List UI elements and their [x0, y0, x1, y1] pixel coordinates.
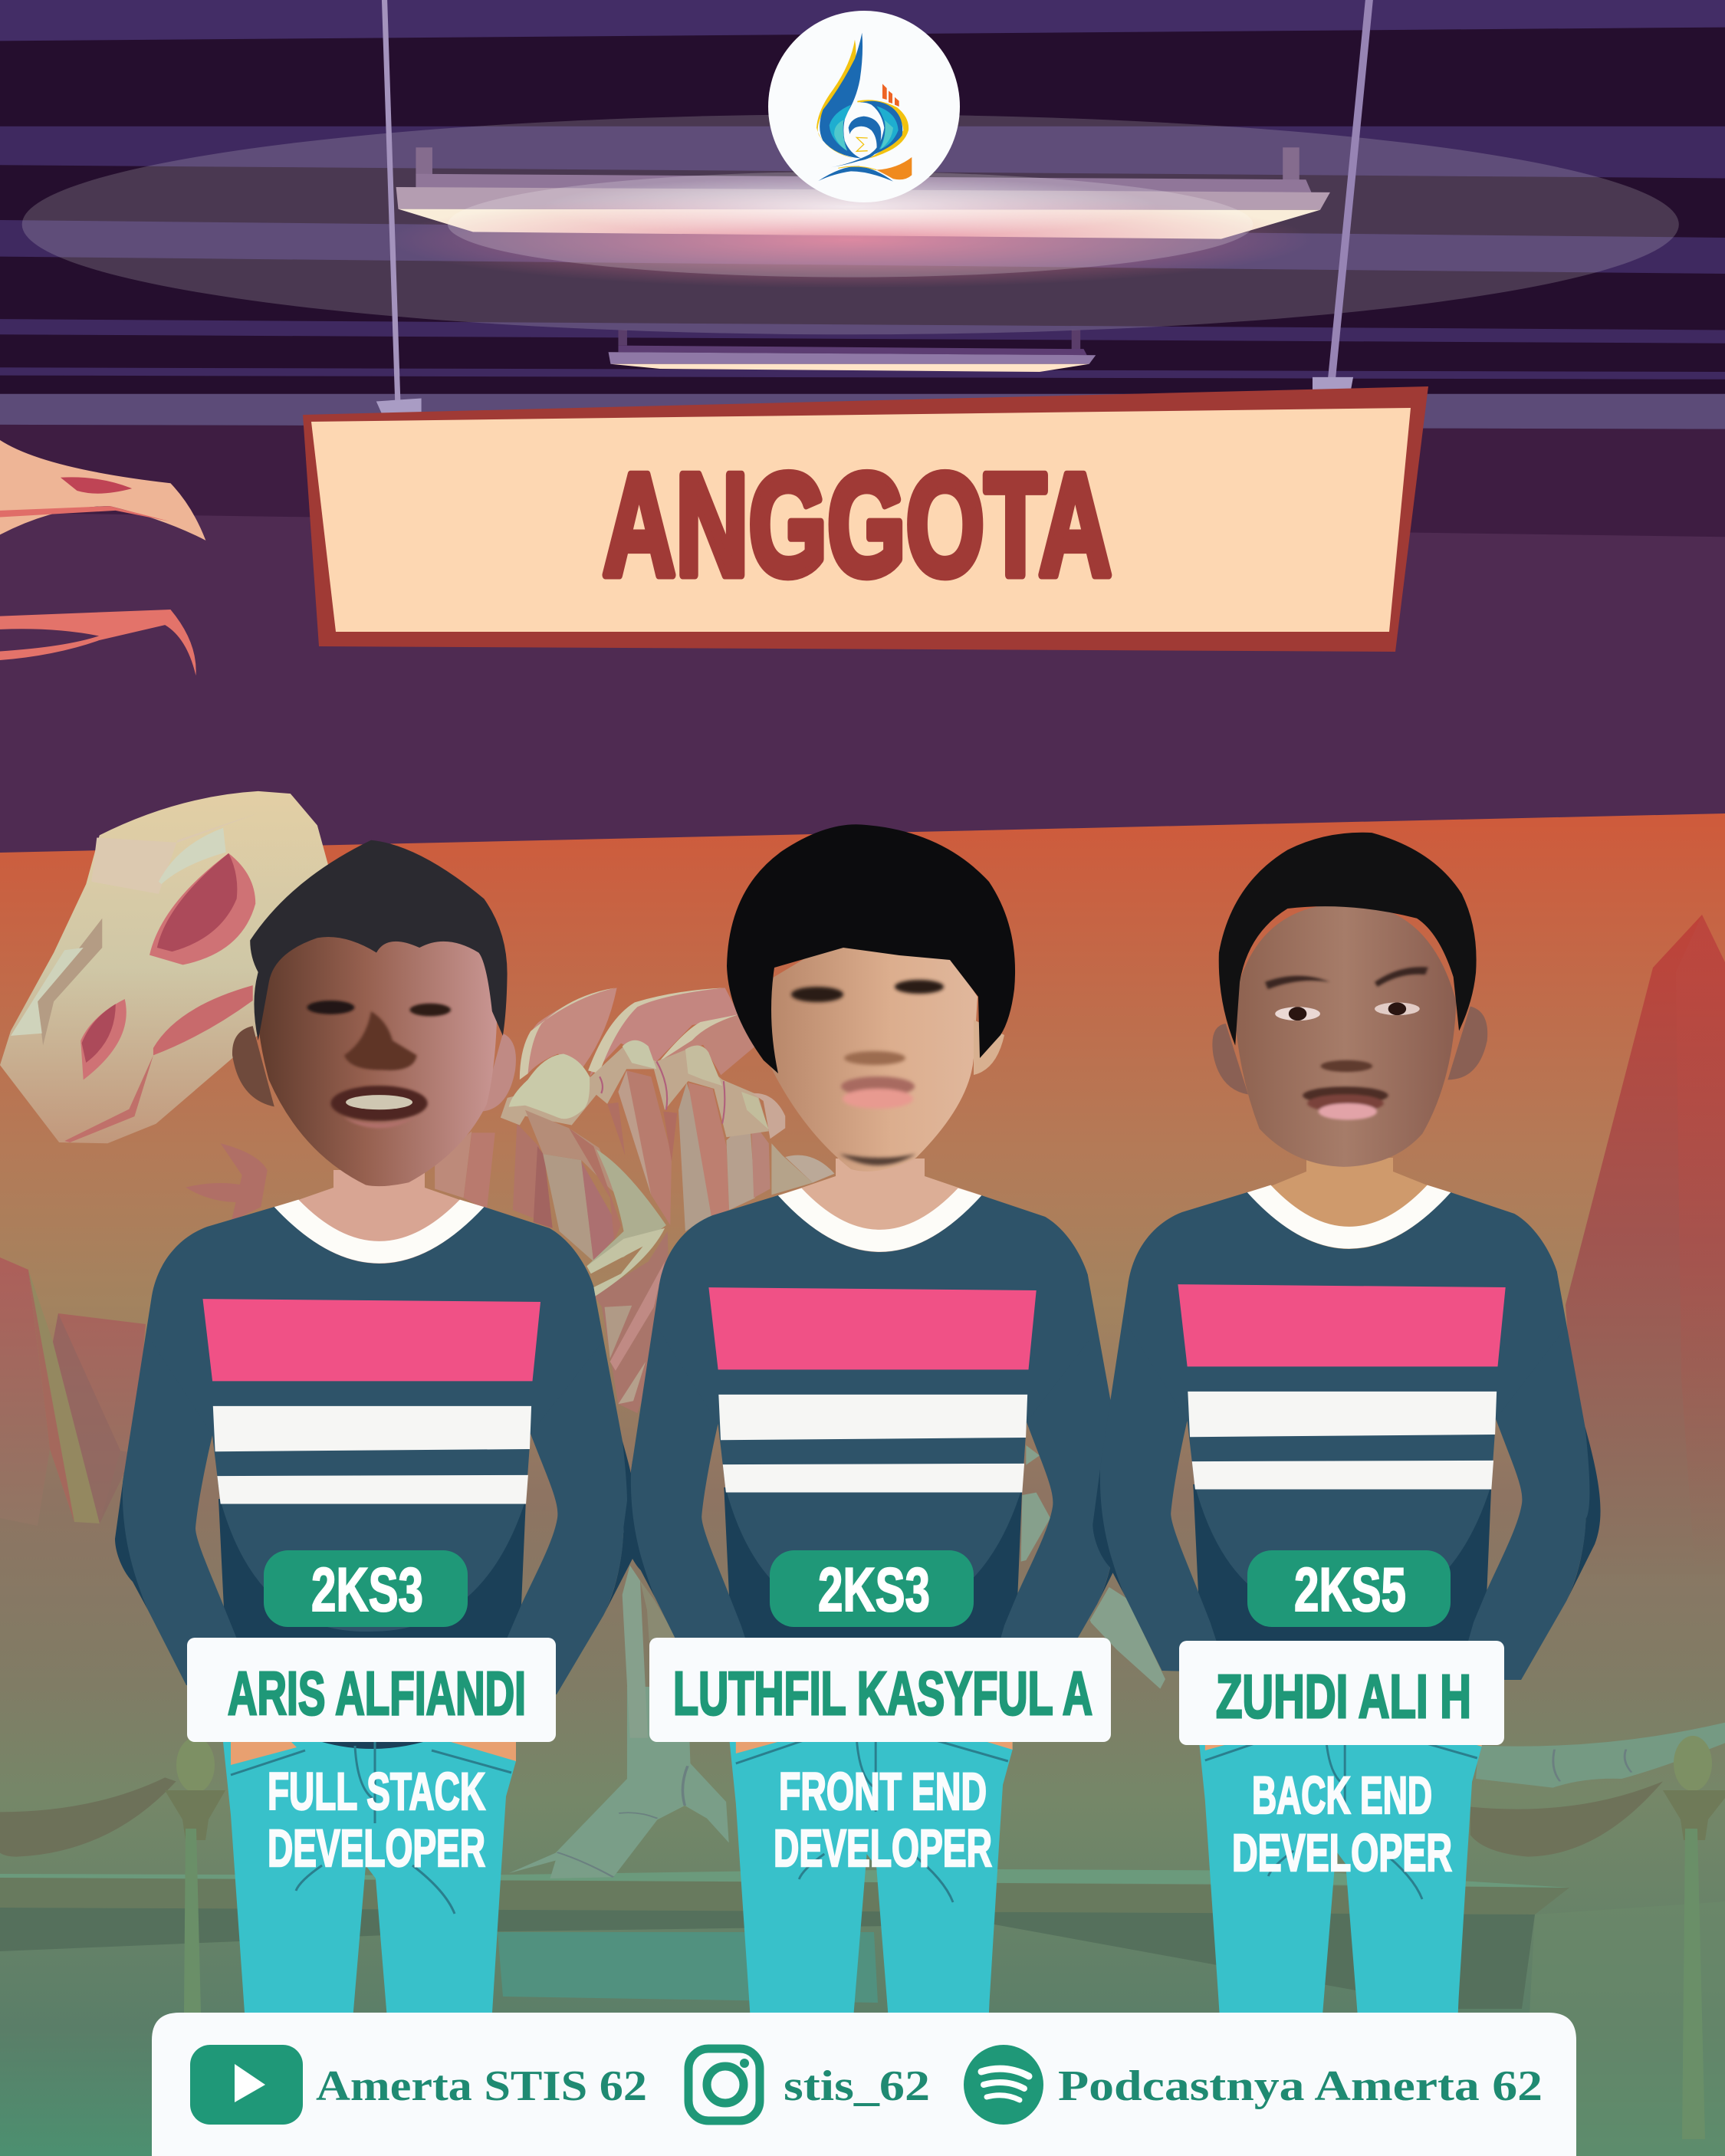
body 2 — [623, 1188, 1132, 2036]
back bone right — [1470, 1723, 1725, 1857]
class badge: person 2 — [770, 1550, 974, 1627]
hanging lamps and glow — [22, 0, 1679, 414]
instagram label: stis_62 — [784, 2062, 930, 2110]
neck 1 — [268, 1170, 491, 1288]
icon: instagram — [688, 2049, 760, 2121]
gap bones — [1021, 1445, 1165, 1689]
youtube label: Amerta STIS 62 — [316, 2062, 647, 2110]
head 3 — [1212, 833, 1487, 1167]
neck 2 — [771, 1159, 989, 1277]
class badge: person 3: 2KS5 — [1294, 1556, 1406, 1625]
name card: person 2 — [649, 1638, 1111, 1742]
curtain left — [0, 1777, 176, 1857]
head 2 — [727, 824, 1015, 1172]
person 2 — [623, 824, 1132, 2036]
middle leg bone — [509, 1687, 729, 1878]
mid bone column — [623, 1566, 676, 1738]
light pool — [22, 114, 1679, 334]
sign title: ANGGOTA — [603, 444, 1112, 606]
small plant — [186, 1143, 268, 1221]
role: front end developer: DEVELOPER — [774, 1819, 992, 1878]
lower background: hall, curtains, posts and platform — [0, 1445, 1725, 2156]
neck 3 — [1238, 1158, 1460, 1273]
role: front end developer — [774, 1762, 992, 1878]
name card: person 1: ARIS ALFIANDI — [228, 1659, 526, 1727]
role: full stack developer: FULL STACK — [268, 1762, 485, 1821]
footer panel — [152, 2013, 1576, 2156]
name card: person 1 — [187, 1638, 556, 1742]
role: full stack developer — [268, 1762, 485, 1878]
skull — [0, 791, 328, 1143]
spotify label: Podcastnya Amerta 62 — [1058, 2062, 1543, 2110]
name card: person 3 — [1179, 1641, 1504, 1745]
class badge: person 2: 2KS3 — [818, 1556, 930, 1625]
hanging sign — [303, 386, 1428, 652]
role: full stack developer: DEVELOPER — [268, 1819, 485, 1878]
class badge: person 1: 2KS3 — [311, 1556, 423, 1625]
person 3 — [1092, 833, 1601, 2033]
body 3 — [1092, 1185, 1601, 2033]
background rocks — [0, 915, 1725, 1574]
head 1 — [232, 840, 516, 1186]
body 1 — [115, 1200, 639, 2047]
icon: spotify — [964, 2045, 1043, 2125]
lamp: large — [396, 147, 1330, 239]
skeleton ribs — [435, 988, 835, 1413]
icon: youtube — [190, 2045, 303, 2125]
person 1 — [115, 840, 639, 2047]
wires — [376, 0, 1373, 414]
eagle beak — [0, 440, 205, 675]
name card: person 3: ZUHDI ALI H — [1216, 1662, 1471, 1730]
class badge: person 1 — [264, 1550, 468, 1627]
class badge: person 3 — [1247, 1550, 1451, 1627]
post left — [165, 1737, 225, 2013]
role: back end developer: BACK END — [1252, 1766, 1432, 1825]
role: back end developer: DEVELOPER — [1232, 1823, 1452, 1882]
role: back end developer — [1232, 1766, 1452, 1882]
name card: person 2: LUTHFIL KASYFUL A — [673, 1659, 1092, 1727]
lamp: small — [609, 330, 1096, 372]
logo — [768, 11, 960, 202]
post right — [1663, 1736, 1725, 2139]
role: front end developer: FRONT END — [779, 1762, 987, 1821]
